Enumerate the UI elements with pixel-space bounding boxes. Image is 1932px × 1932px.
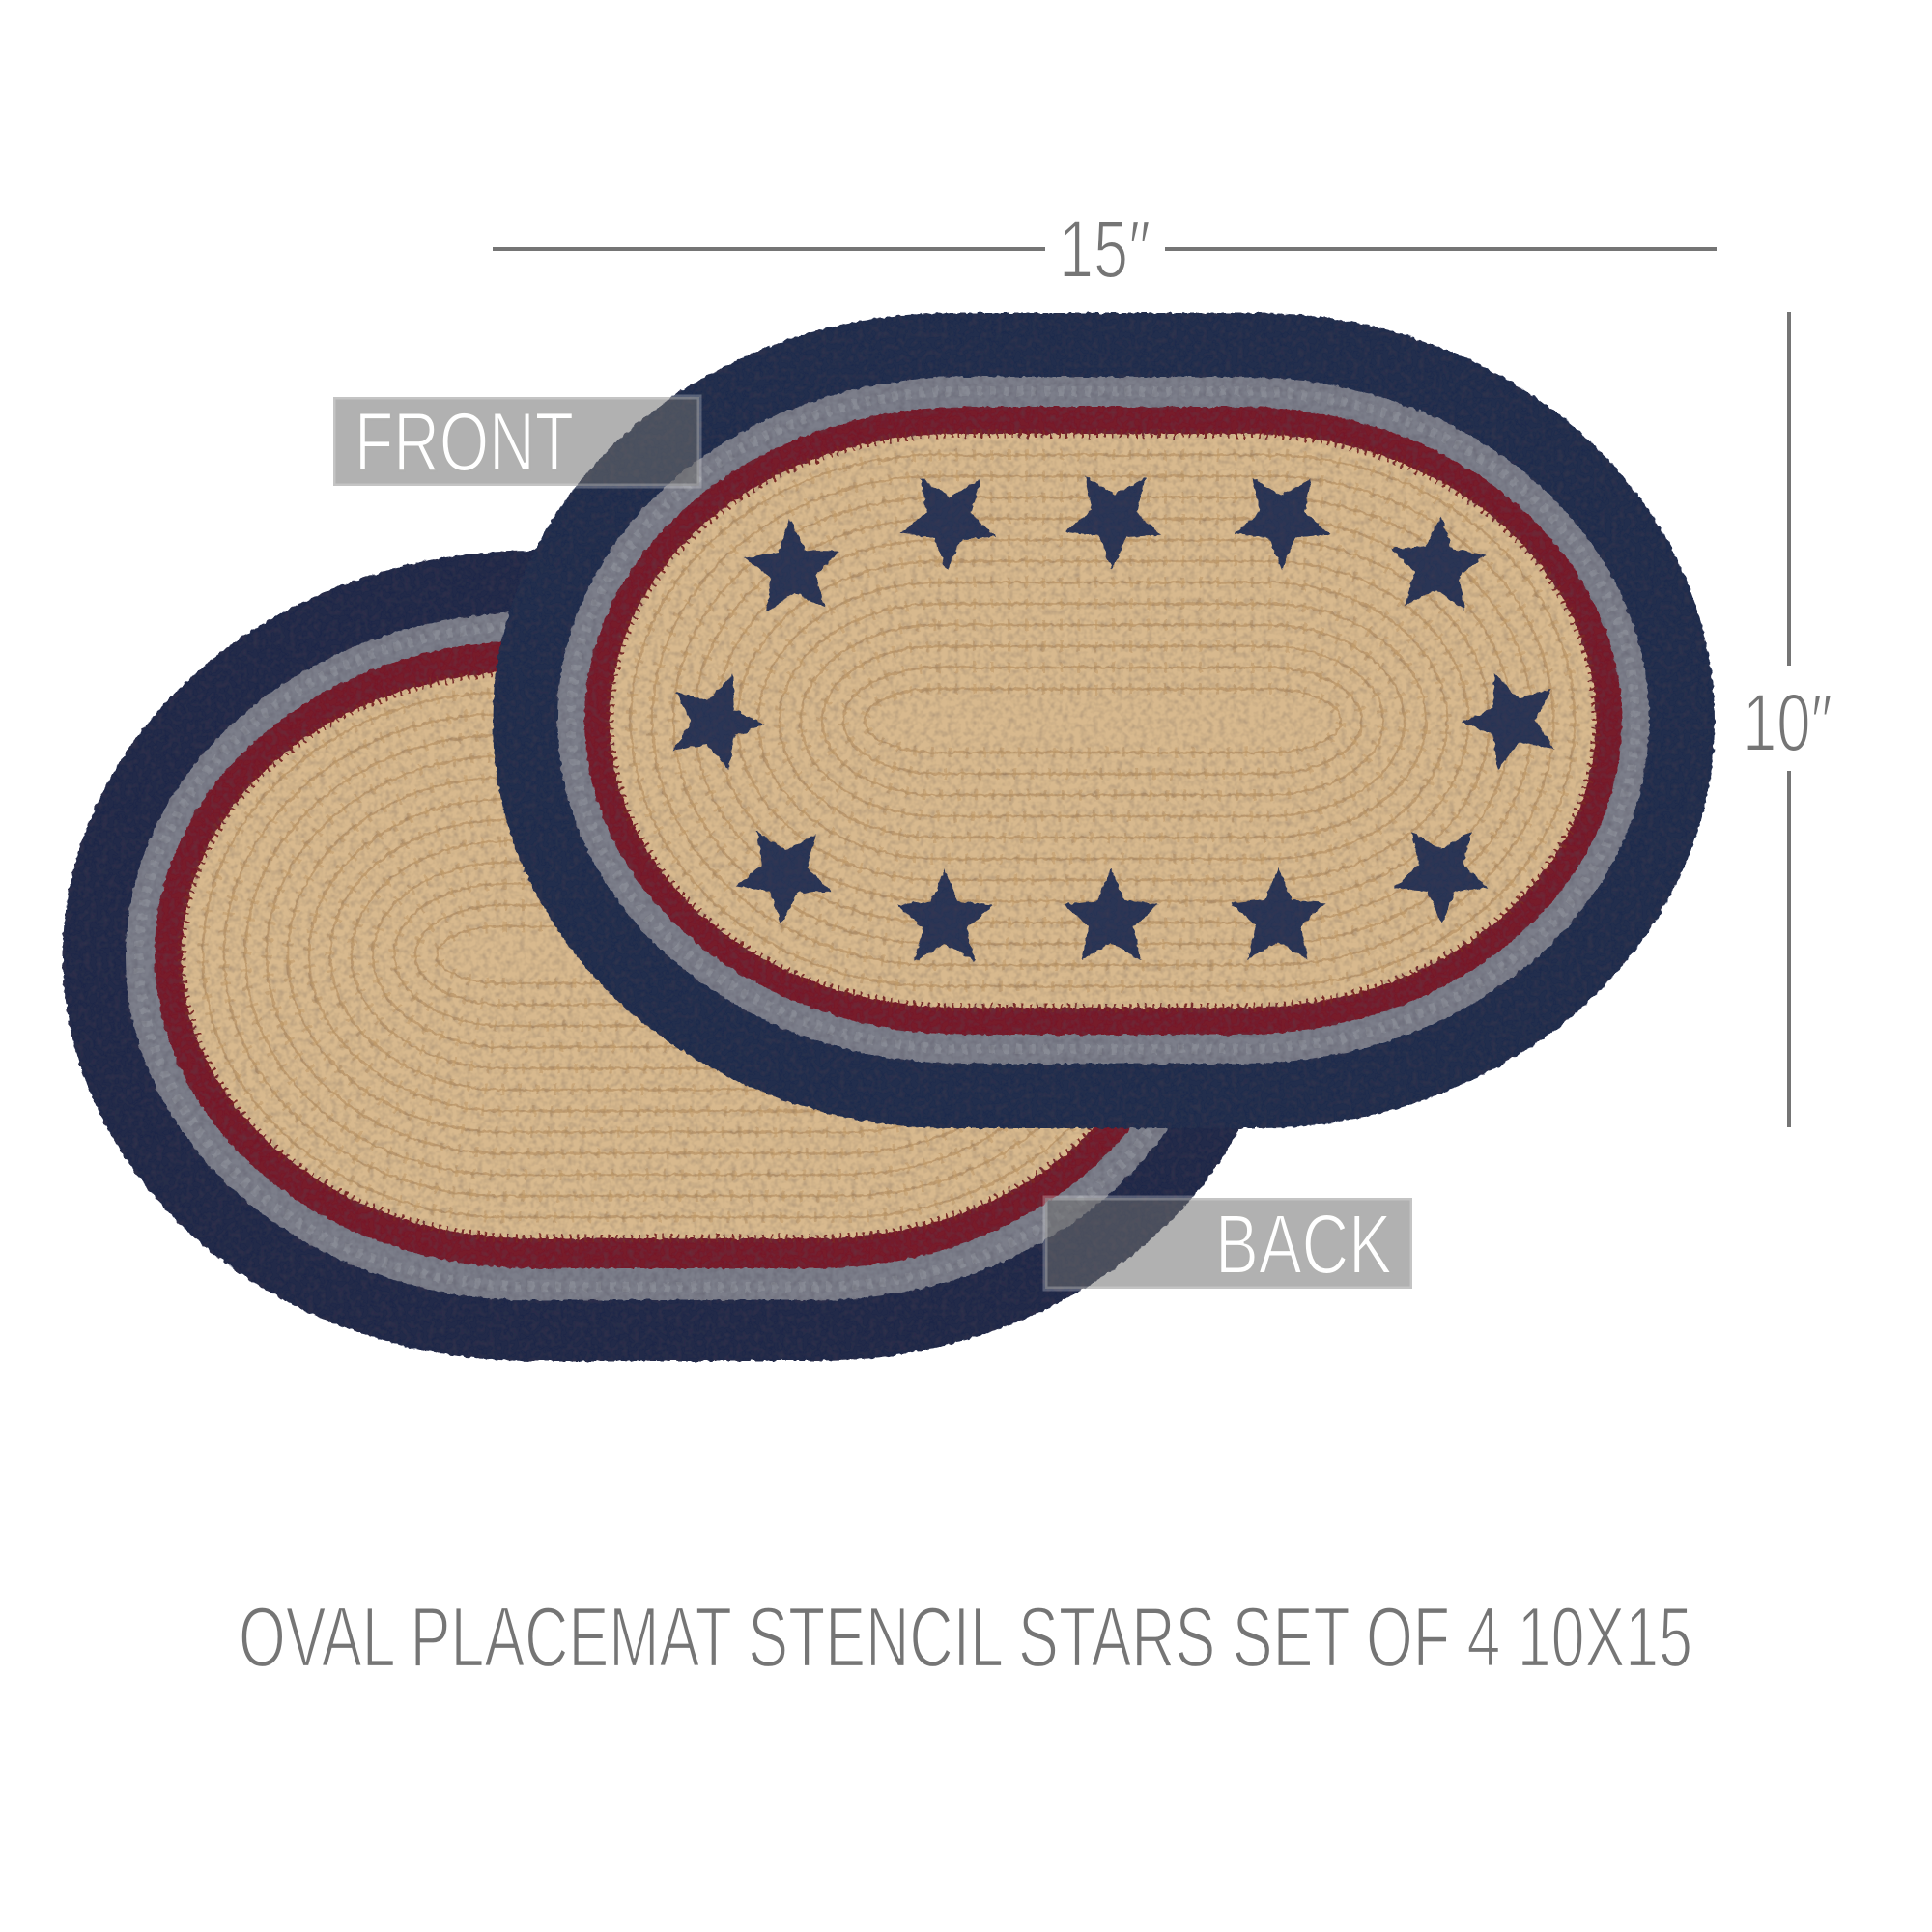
back navy border [63,551,1285,1361]
placemat: back [63,551,1285,1361]
back gray band [126,612,1222,1300]
front gray braid highlights [571,391,1635,1049]
front navy border [493,313,1715,1128]
back red band [155,640,1193,1268]
front red band [584,407,1622,1035]
back gray braid highlights [139,626,1208,1287]
back jute centre [182,671,1166,1238]
front braid rings [631,455,1575,986]
front jute centre [610,434,1596,1008]
height dimension: 10 inches [1743,312,1833,1127]
label: back: BACK [1215,1198,1392,1292]
stencil stars [656,475,1571,961]
back braid rings [203,693,1145,1217]
label: front: FRONT [355,396,574,489]
placemat: front [493,313,1715,1128]
width dimension: 15 inches [493,204,1717,295]
front gray band [557,377,1649,1064]
label: back [1045,1198,1412,1292]
width dimension: 15 inches: 15″ [1059,204,1151,295]
height dimension: 10 inches: 10″ [1743,677,1833,768]
